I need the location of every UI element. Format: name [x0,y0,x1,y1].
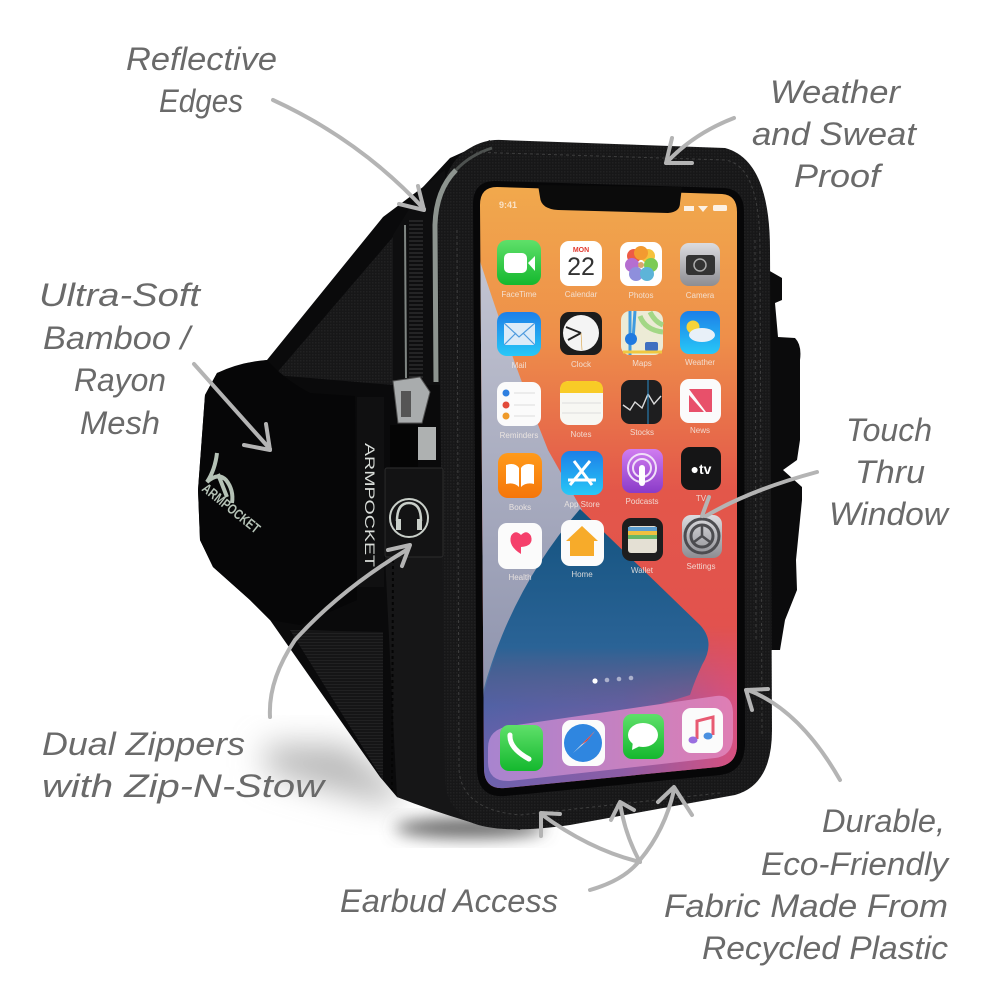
app labels: Notes [571,430,591,439]
reflective edge top [456,148,492,170]
wallpaper: blue shape [480,509,709,760]
app labels: Maps [632,359,652,368]
folded strap with logo [198,360,357,625]
label: weather and sweat proof: Proof [794,158,883,194]
thin zipper line [405,225,406,378]
label: ultra-soft bamboo rayon mesh: Bamboo / [43,320,193,356]
armband [198,140,802,830]
status bar [499,200,727,212]
app labels: Health [508,573,532,582]
app labels: App Store [564,500,600,509]
label: dual zippers: with Zip-N-Stow [42,768,326,804]
app labels: Mail [512,361,527,370]
app labels: Settings [687,562,715,571]
body silhouette [198,140,560,830]
arrow: bamboo mesh [194,364,270,450]
arrow: reflective edges [273,100,424,210]
label: ultra-soft bamboo rayon mesh: Ultra-Soft [39,277,201,313]
label: reflective edges: Edges [159,83,243,119]
wallpaper: lower gradient [483,636,737,788]
zipper pulls [385,377,443,557]
window case frame [438,140,772,829]
app labels: News [690,426,710,435]
strap logo [199,453,264,537]
app row 5 [498,515,722,569]
notch [538,185,682,213]
headphone icon [390,499,428,537]
label: ultra-soft bamboo rayon mesh: Rayon [74,362,166,398]
wallpaper [478,185,740,795]
zipper track [393,170,445,385]
app labels: FaceTime [501,290,537,299]
app labels: Books [509,503,531,512]
window inner border [473,181,745,796]
label: ultra-soft bamboo rayon mesh [39,277,201,441]
label: reflective edges [126,41,277,119]
label: weather and sweat proof: and Sweat [752,116,917,152]
app row 3 [497,379,721,426]
label: durable fabric: Fabric Made From [664,888,948,924]
app labels: Reminders [500,431,538,440]
page dots [592,676,633,684]
stitching [457,152,762,815]
app labels [500,290,715,582]
label: durable fabric [664,803,950,966]
lower ribbed panel [290,630,383,780]
label: touch thru window: Thru [855,454,925,490]
label: touch thru window [829,412,950,532]
app labels: Photos [629,291,653,300]
app labels: Calendar [565,290,598,299]
app labels: TV [696,494,707,503]
app row 1: MON [573,247,589,254]
arrow: durable fabric [746,689,840,780]
label: weather and sweat proof: Weather [770,74,901,110]
elastic bumps on right side [768,270,802,650]
strap logo: ARMPOCKET [199,480,264,537]
app labels: Wallet [631,566,654,575]
app labels: Podcasts [626,497,658,506]
label: reflective edges: Reflective [126,41,277,77]
zipper teeth [409,220,423,378]
label: durable fabric: Eco-Friendly [761,846,950,882]
reflective edge [435,170,456,382]
app labels: Home [571,570,593,579]
status bar: 9:41 [499,200,517,210]
label: durable fabric: Recycled Plastic [702,930,948,966]
dock [488,696,733,781]
app labels: Camera [686,291,715,300]
arrow: weather and sweat proof [666,118,734,163]
label: touch thru window: Touch [846,412,932,448]
side brand text: ARMPOCKET [362,443,378,568]
dock icons [500,708,723,771]
app row 4: ●tv [691,461,712,477]
label: dual zippers [42,726,326,804]
ground shadow [265,745,545,838]
arrow: dual zippers [270,545,410,717]
app row 4 [498,447,721,498]
app labels: Stocks [630,428,654,437]
app row 1 [497,240,720,286]
phone screen [478,185,740,795]
arrow: touch thru window [702,472,817,516]
app row 2 [497,311,720,356]
loop tab [357,397,384,587]
label: weather and sweat proof [752,74,917,194]
app row 1: 22 [567,253,595,281]
label: earbud access: Earbud Access [340,883,558,919]
app labels: Weather [685,358,715,367]
label: ultra-soft bamboo rayon mesh: Mesh [80,405,160,441]
label: durable fabric: Durable, [822,803,945,839]
arrow: earbud access [541,787,692,890]
mesh back [275,237,393,385]
lower fabric panel [385,555,470,822]
label: touch thru window: Window [829,496,950,532]
app labels: Clock [571,360,592,369]
wallpaper: gray wedge [478,255,582,700]
label: dual zippers: Dual Zippers [42,726,245,762]
lower seam [392,560,393,790]
